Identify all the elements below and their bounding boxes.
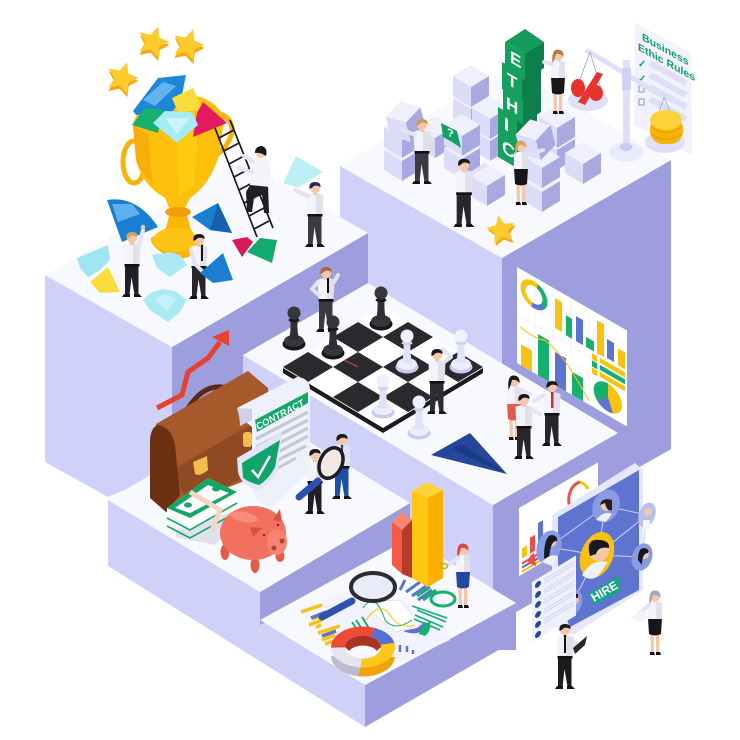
wall chart [517,267,627,427]
icon: blue gem in hands [200,253,233,283]
person: woman on stack [544,49,565,114]
icon: contract document: CONTRACT [254,397,308,433]
icon: speech bubble question: ? [447,126,454,141]
poster: business ethic rules: Ethic Rules [638,42,695,84]
person: man from back with magnifier [305,449,325,514]
icon: ETHIC green block tower: E [510,46,521,72]
icon: contract document [237,377,310,507]
person: woman holding cube [514,140,543,205]
candidate list [532,556,576,642]
person: man with tie holding gem [189,234,209,299]
icon: ETHIC green block tower: H [506,92,518,119]
person: woman in red skirt [507,375,530,440]
icon: briefcase [150,371,272,512]
icon: gems in trophy [132,75,227,143]
icon: ladder [215,120,273,237]
icon: speech bubble question [441,123,461,148]
panel: data analysis [300,482,470,674]
icon: red growth arrow [157,330,229,408]
platform: chess block [243,283,671,650]
bar: red [392,512,412,578]
poster: business ethic rules [634,23,695,155]
icon: balance scale [568,50,685,162]
platform: ethics tall block [340,68,671,620]
poster: business ethic rules: Business [642,32,689,68]
icon: front cubes [383,97,601,212]
panel: recruitment [519,462,662,689]
icon: small pie [528,553,536,566]
badge: HIRE: HIRE [588,578,620,605]
chess pawn front black [322,316,344,360]
panel: chess strategy [282,267,507,474]
people: group discussion [507,375,562,459]
icon: ETHIC green block tower: I [504,113,509,137]
person: red-haired woman with lens [440,543,470,608]
panel: ethics blocks [383,29,601,247]
person: man with red tie [534,381,562,446]
icon: back cubes [384,65,575,181]
panel: trophy and gems [77,21,325,322]
panel: contract and finance [150,330,352,573]
platform: analysis step [108,500,516,727]
platform: trophy block [45,161,368,497]
person: grey-haired woman [631,590,662,655]
platform: contract step [108,411,410,592]
icon: donut chart 3D [330,626,396,674]
poster: business ethic rules: ✓ [638,74,646,85]
icon: ETHIC green block tower: T [507,68,518,94]
icon: paper plane [431,433,507,474]
icon: loose gems [77,156,323,322]
icon: ring magnifier [322,573,395,617]
icon: orange star [484,213,518,247]
person: man holding blue gem [122,225,145,297]
icon: piggy bank [220,506,287,573]
icon: three stars [102,21,209,99]
chess pawn white front [408,396,430,440]
panel: scale and rules [568,23,695,162]
person: man with laptop [555,624,587,689]
icon: tablet [552,463,643,635]
person: man from back [514,394,540,459]
person: man in blue trousers [332,434,352,499]
network lines [549,506,647,602]
person: man lifting cube [400,119,432,184]
chess pawns black [282,286,392,350]
person: man thinking at chess [312,267,338,332]
person: man at chess board [427,349,451,414]
person: man climbing ladder [238,146,270,213]
person: man in black trousers [454,159,485,227]
icon: ETHIC green block tower [498,29,544,168]
avatars [532,485,659,617]
icon: gold coins [650,110,683,144]
icon: large magnifier [299,444,348,497]
bar: yellow tall [412,482,443,587]
person: man lifting pale gem [295,182,325,247]
icon: gold trophy [123,93,232,259]
icon: ETHIC green block tower: C [502,136,515,164]
icon: data papers [300,580,455,660]
icon: orange ring [569,482,588,507]
icon: red percent [571,72,603,105]
chess board [283,307,483,433]
chess pawns white [372,330,472,418]
chart panel [519,462,598,576]
icon: stack of money [167,478,238,545]
poster: business ethic rules: ✓ [638,59,646,70]
